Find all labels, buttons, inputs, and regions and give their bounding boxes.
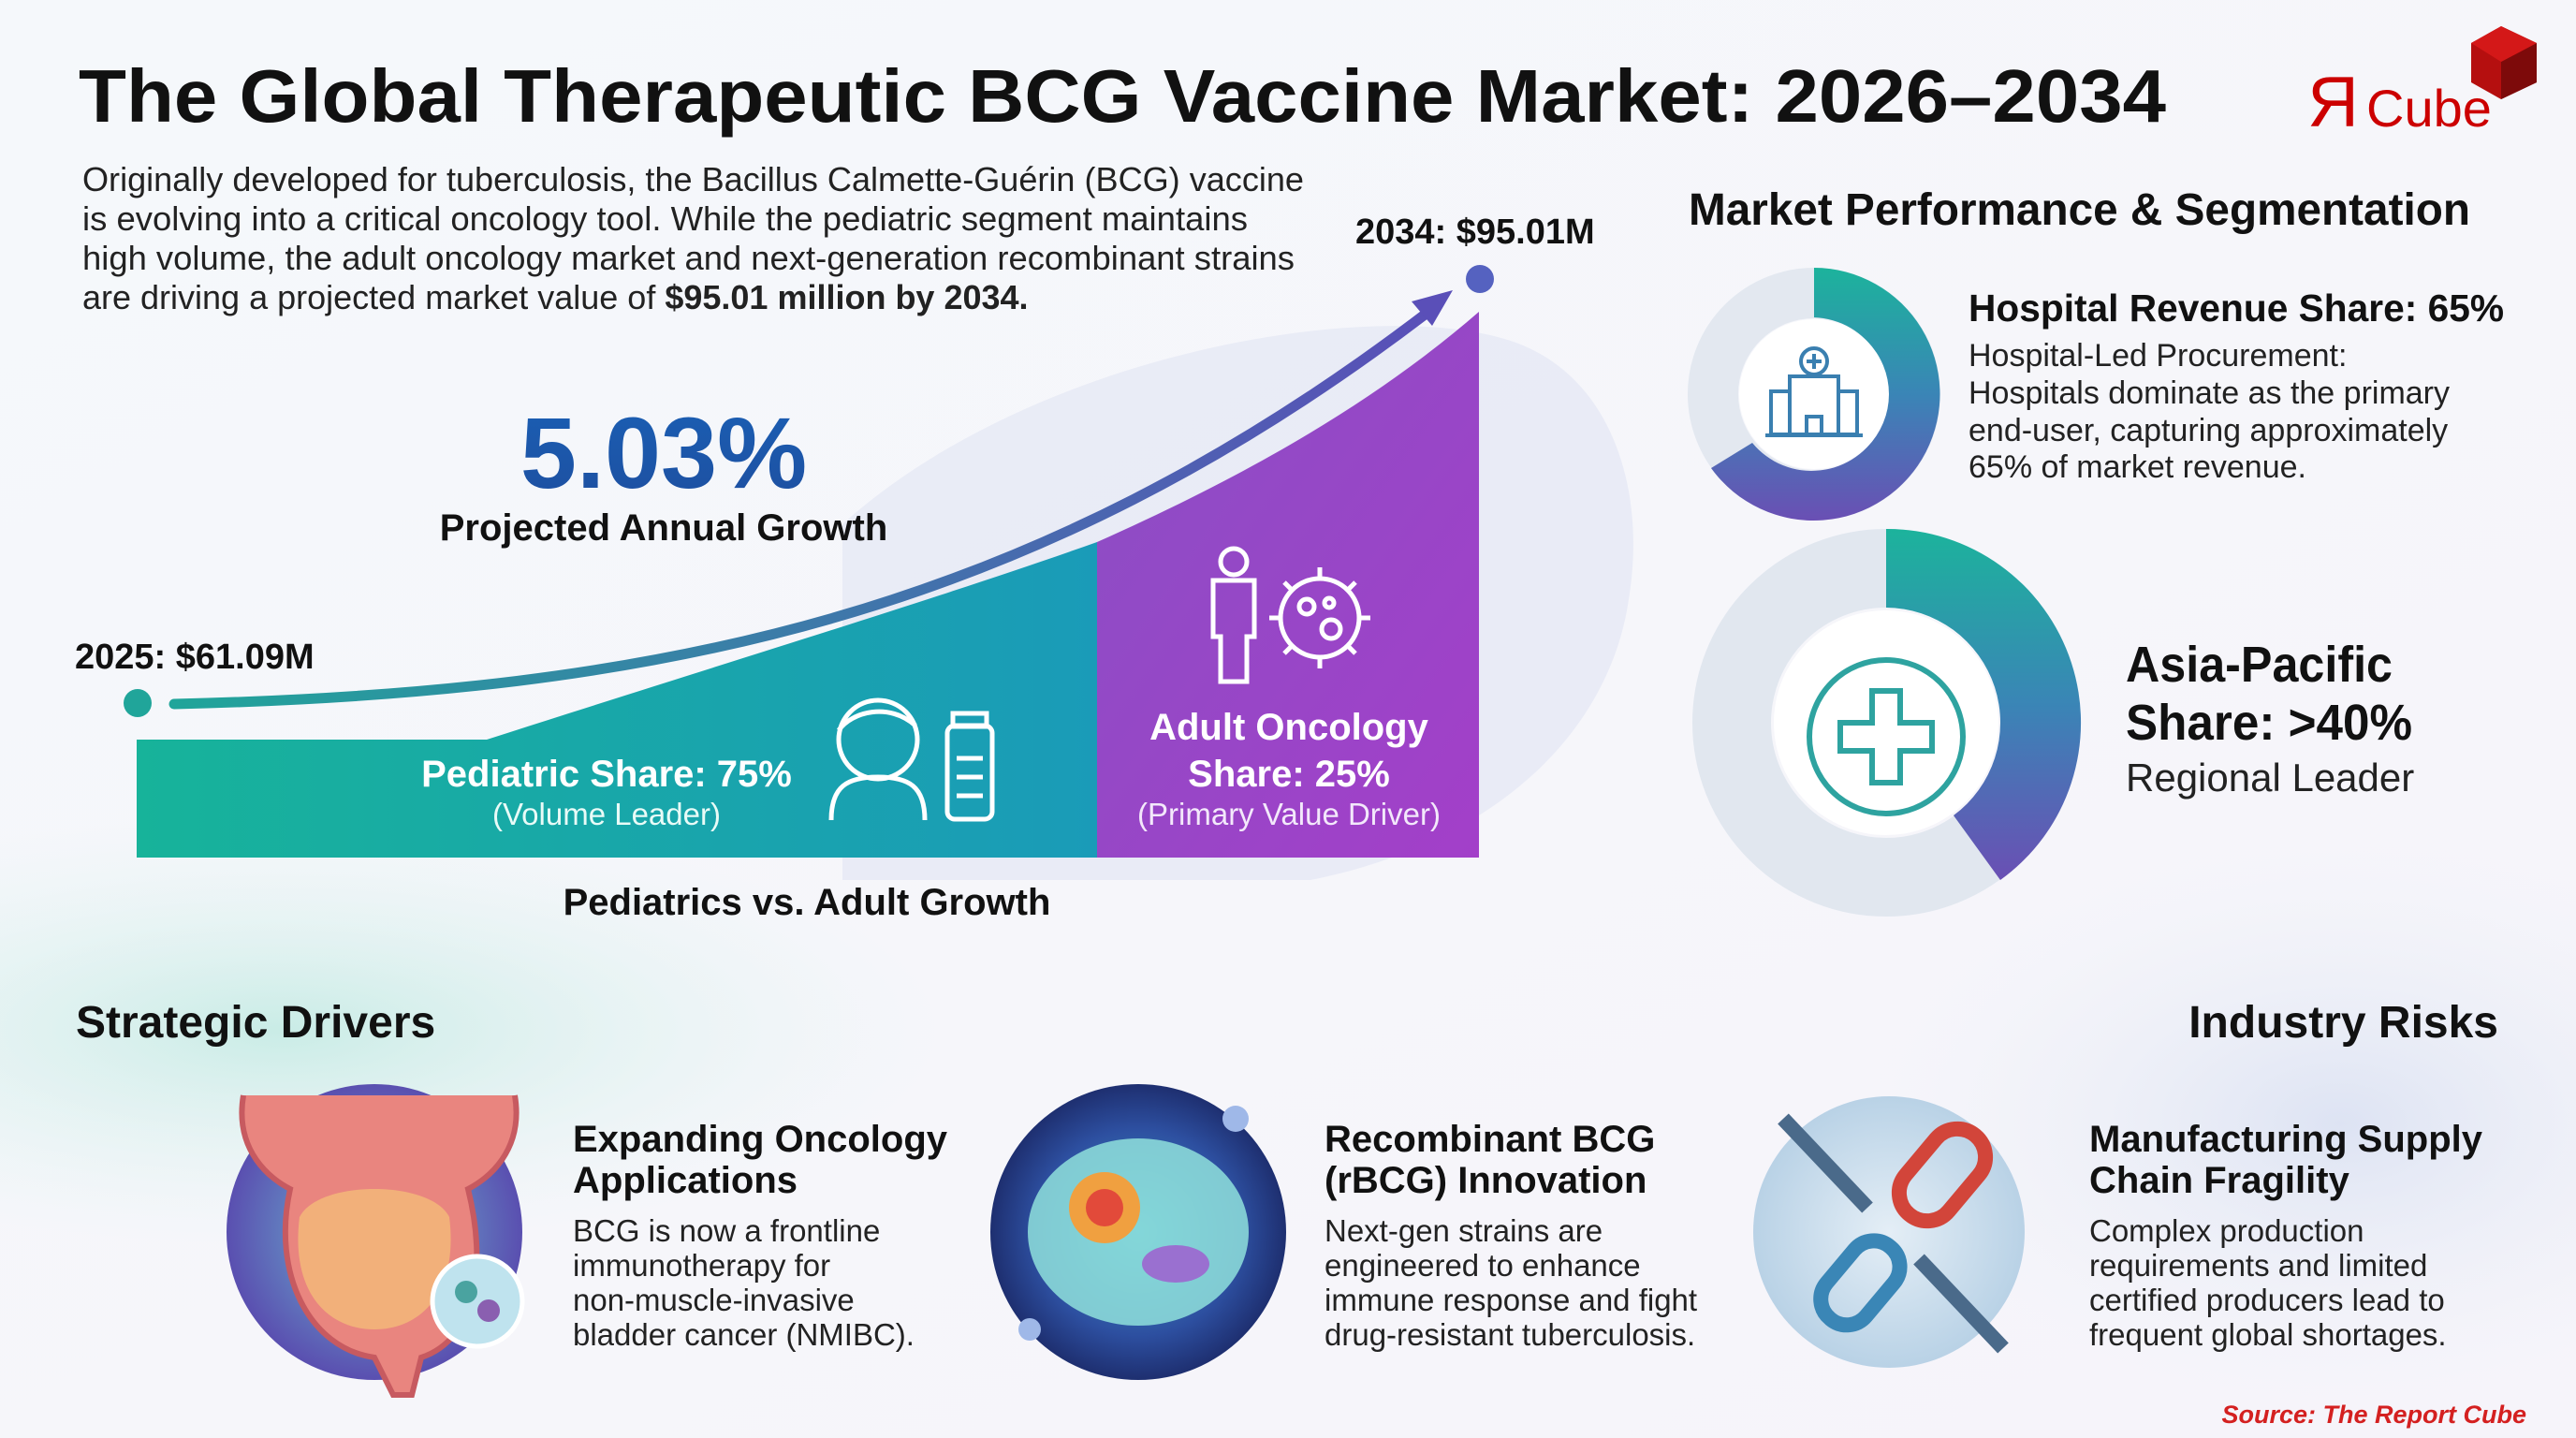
logo: Cube [2366,79,2492,138]
intro text: are driving a projected market value of $95.01 million by 2034. [82,278,1029,316]
hospital text: 65% of market revenue. [1969,449,2306,485]
icon: bladder [227,1084,522,1395]
risk text [2089,1119,2483,1352]
icon: medical cross [1809,660,1963,814]
intro text: Originally developed for tuberculosis, the Bacillus Calmette-Guérin (BCG) vaccine [82,160,1304,198]
adult label [1137,707,1441,831]
label 2034: 2034: $95.01M [1355,213,1595,252]
asia-pacific text: Share: >40% [2126,695,2412,751]
driver 1 text: Expanding Oncology [573,1119,948,1160]
driver 2 text: immune response and fight [1325,1283,1697,1317]
growth rate [440,396,887,549]
chart caption: Pediatrics vs. Adult Growth [564,882,1050,923]
risk text: Chain Fragility [2089,1160,2350,1201]
intro text: is evolving into a critical oncology tool. While the pediatric segment maintains [82,199,1248,238]
pediatric label [421,754,792,831]
risk text: requirements and limited [2089,1248,2427,1283]
adult label: (Primary Value Driver) [1137,797,1441,831]
icon: broken chain [1753,1096,2025,1368]
icon: child and vial [831,700,992,820]
heading: market performance: Market Performance & Segmentation [1689,185,2470,235]
donut: asia-pacific [1732,529,2081,880]
risk text: certified producers lead to [2089,1283,2445,1317]
icon: hospital [1765,348,1863,435]
driver 2 text: Next-gen strains are [1325,1213,1603,1248]
hospital text: Hospital-Led Procurement: [1969,338,2347,374]
source: Source: The Report Cube [2221,1401,2526,1429]
growth rate: Projected Annual Growth [440,507,887,549]
risk text: frequent global shortages. [2089,1317,2447,1352]
driver 1 text: immunotherapy for [573,1248,830,1283]
growth rate: 5.03% [520,396,807,509]
driver 2 text: (rBCG) Innovation [1325,1160,1647,1201]
logo [2307,26,2537,142]
logo: R [2307,63,2359,142]
asia-pacific text [2126,637,2414,800]
risk text: Manufacturing Supply [2089,1119,2483,1160]
hospital text [1969,286,2504,485]
driver 1 text [573,1119,948,1352]
adult label: Share: 25% [1188,754,1390,795]
donut: hospital [1711,268,1939,521]
asia-pacific text: Regional Leader [2126,756,2414,800]
arrow curve [174,309,1432,704]
driver 2 text: drug-resistant tuberculosis. [1325,1317,1695,1352]
label 2025: 2025: $61.09M [75,638,315,677]
icon: adult and virus [1213,549,1370,682]
driver 1 text: BCG is now a frontline [573,1213,880,1248]
hospital text: Hospital Revenue Share: 65% [1969,286,2504,330]
intro text: high volume, the adult oncology market and next-generation recombinant strains [82,239,1295,277]
icon: cell [990,1084,1286,1380]
driver 2 text [1325,1119,1697,1352]
driver 2 text: engineered to enhance [1325,1248,1641,1283]
risk text: Complex production [2089,1213,2364,1248]
driver 1 text: non-muscle-invasive [573,1283,855,1317]
hospital text: end-user, capturing approximately [1969,413,2448,448]
heading: strategic drivers: Strategic Drivers [76,998,435,1048]
hospital text: Hospitals dominate as the primary [1969,375,2450,411]
driver 1 text: Applications [573,1160,798,1201]
driver 1 text: bladder cancer (NMIBC). [573,1317,915,1352]
adult label: Adult Oncology [1149,707,1429,748]
pediatric label: (Volume Leader) [492,797,721,831]
asia-pacific text: Asia-Pacific [2126,637,2393,693]
driver 2 text: Recombinant BCG [1325,1119,1655,1160]
chart: growth area [124,265,1494,858]
pediatric label: Pediatric Share: 75% [421,754,792,795]
heading: industry risks: Industry Risks [2188,998,2498,1048]
title: The Global Therapeutic BCG Vaccine Market: 2026–2034 [79,54,2167,138]
